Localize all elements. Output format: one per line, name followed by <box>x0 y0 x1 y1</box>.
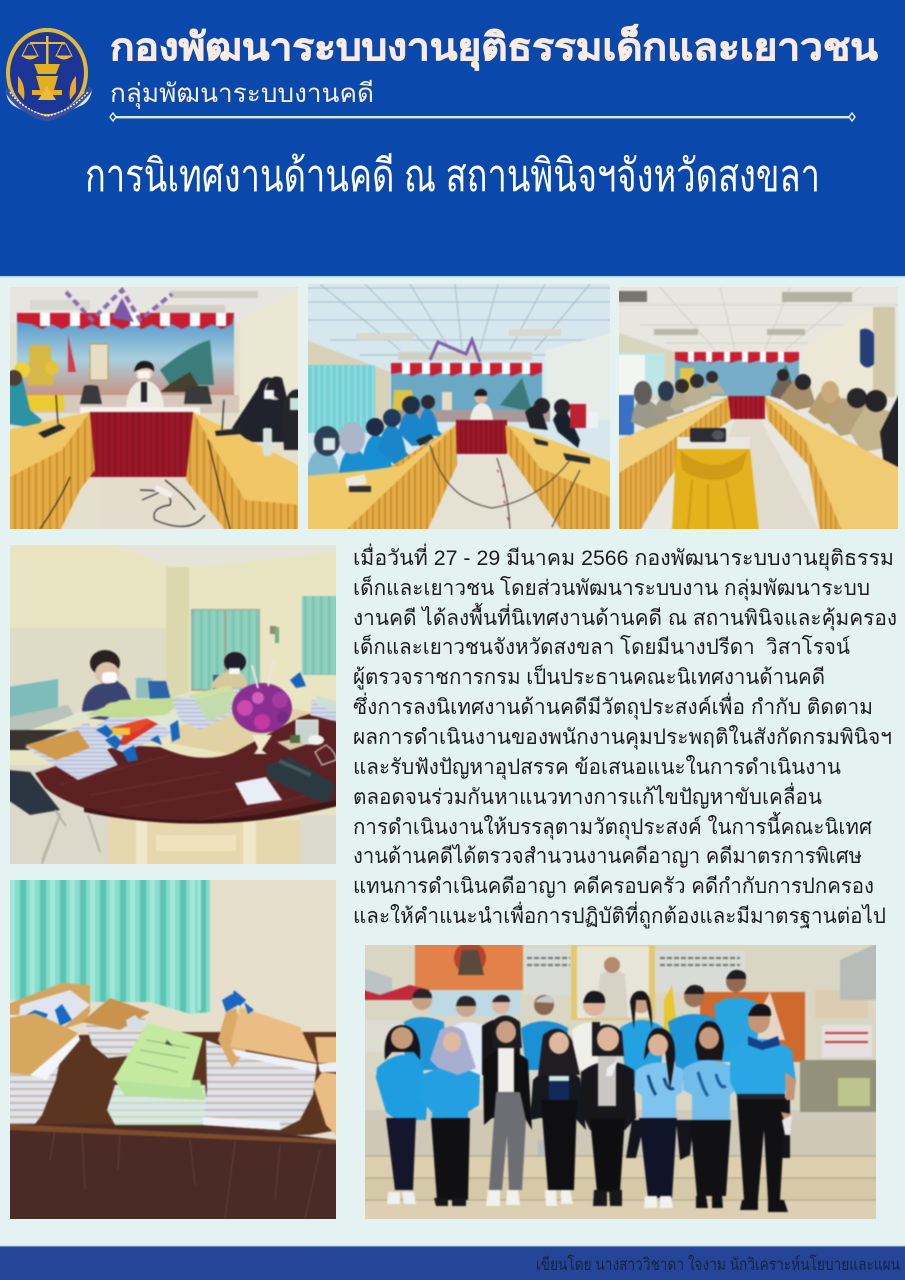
chairperson <box>126 361 164 407</box>
head table skirt <box>90 412 193 477</box>
man in blue polo <box>730 1004 796 1212</box>
green files <box>107 1023 208 1125</box>
woman behind the flowers <box>210 652 248 688</box>
body text: activity description: ผู้ตรวจราชการกรม เป็นประธานคณะนิเทศงานด้านคดี <box>353 663 825 690</box>
chairperson <box>470 389 493 420</box>
emblem: department seal <box>6 28 92 120</box>
left table <box>306 424 457 531</box>
leader in black jacket <box>580 1024 636 1206</box>
photo: case files stacked on a desk <box>10 880 336 1219</box>
staff member 1 <box>376 1025 428 1204</box>
left table <box>8 412 95 531</box>
glass and snack tray <box>277 720 324 750</box>
floor <box>427 454 565 531</box>
table base <box>8 700 338 866</box>
inspector in navy zip top <box>530 1029 586 1206</box>
microphones, bottle and cables <box>38 395 272 529</box>
stage banner <box>14 313 234 397</box>
body text: activity description: ผลการดำเนินงานของพนักงานคุมประพฤติในสังกัดกรมพินิจฯ <box>353 725 892 750</box>
stacks at far left <box>8 983 150 1124</box>
photo: meeting room, wide view <box>308 284 610 529</box>
photo: meeting room, chair at head table <box>10 287 298 529</box>
back row of staff <box>404 970 790 1160</box>
stage banner <box>675 352 799 396</box>
uniformed delegates, left row <box>631 371 726 430</box>
footer band <box>0 1246 905 1280</box>
delegates on the left <box>306 395 444 512</box>
staff member in light-blue shirt <box>634 1028 684 1208</box>
photo: group portrait in front of building <box>365 945 876 1219</box>
document bag and papers <box>235 745 336 805</box>
staff member in light-blue shirt, dark trousers <box>683 1021 737 1208</box>
building backdrop <box>363 942 878 1112</box>
stacks of case files <box>25 672 338 780</box>
front row of staff <box>376 1004 796 1212</box>
photo: meeting room, view with projector <box>619 287 898 529</box>
seated delegates <box>6 370 300 450</box>
flower vase <box>232 660 292 754</box>
curved dark wood table <box>35 705 338 824</box>
body text: activity description: เมื่อวันที่ 27 - 29 มีนาคม 2566 กองพัฒนาระบบงานยุติธรรม <box>353 543 894 571</box>
body text: activity description: เด็กและเยาวชนจังหวัดสงขลา โดยมีนางปรีดา วิสาโรจน์ <box>353 633 850 659</box>
desk <box>8 1032 338 1221</box>
inspector in black jacket, grey trousers <box>483 1015 532 1206</box>
body text: activity description: งานคดี ได้ลงพื้นที่นิเทศงานด้านคดี ณ สถานพินิจและคุ้มครอง <box>353 603 897 631</box>
photo: officials reviewing case files at curved table <box>10 545 336 864</box>
stage banner <box>391 363 542 421</box>
curtains and door <box>191 596 338 691</box>
divider with diamond ends <box>110 113 855 121</box>
body text: activity description: การดำเนินงานให้บรรลุตามวัตถุประสงค์ ในการนี้คณะนิเทศ <box>353 812 873 840</box>
body text: activity description: และให้คำแนะนำเพื่อการปฏิบัติที่ถูกต้องและมีมาตรฐานต่อไป <box>353 901 886 929</box>
orange files <box>203 990 338 1137</box>
curtain <box>8 878 210 1014</box>
staff member 2 with hijab <box>420 1026 480 1206</box>
body text: activity description: แทนการดำเนินคดีอาญา คดีครอบครัว คดีกำกับการปกครอง <box>353 875 874 898</box>
body text: activity description: งานด้านคดีได้ตรวจสำนวนงานคดีอาญา คดีมาตรการพิเศษ <box>353 844 862 868</box>
body text: activity description: เด็กและเยาวชน โดยส่วนพัฒนาระบบงาน กลุ่มพัฒนาระบบ <box>353 574 870 601</box>
subheading: group name: กลุ่มพัฒนาระบบงานคดี <box>110 78 374 109</box>
right table <box>765 397 900 531</box>
sofa <box>8 678 152 733</box>
ceiling grid <box>308 284 610 355</box>
projector table <box>672 428 759 531</box>
body text: activity description: ซึ่งการลงนิเทศงานด้านคดีมีวัตถุประสงค์เพื่อ กำกับ ติดตาม <box>353 692 873 720</box>
uniformed delegates, right row <box>770 369 900 478</box>
floor <box>692 419 820 531</box>
body text: activity description: และรับฟังปัญหาอุปสรรค ข้อเสนอแนะในการดำเนินงาน <box>353 755 841 780</box>
right table <box>505 424 612 531</box>
front-left stack <box>8 1060 60 1124</box>
header band <box>0 0 905 278</box>
left table <box>617 397 731 531</box>
body text: activity description: ตลอดจนร่วมกันหาแนวทางการแก้ไขปัญหาขับเคลื่อน <box>353 782 822 809</box>
right table <box>186 412 300 531</box>
body text: activity description <box>353 543 897 929</box>
steps <box>363 1120 878 1221</box>
heading: department name: กองพัฒนาระบบงานยุติธรรมเด็กและเยาวชน <box>110 24 878 71</box>
microphones and cables <box>345 434 590 529</box>
woman in plaid jacket <box>82 650 138 722</box>
delegates on the right <box>525 398 598 448</box>
